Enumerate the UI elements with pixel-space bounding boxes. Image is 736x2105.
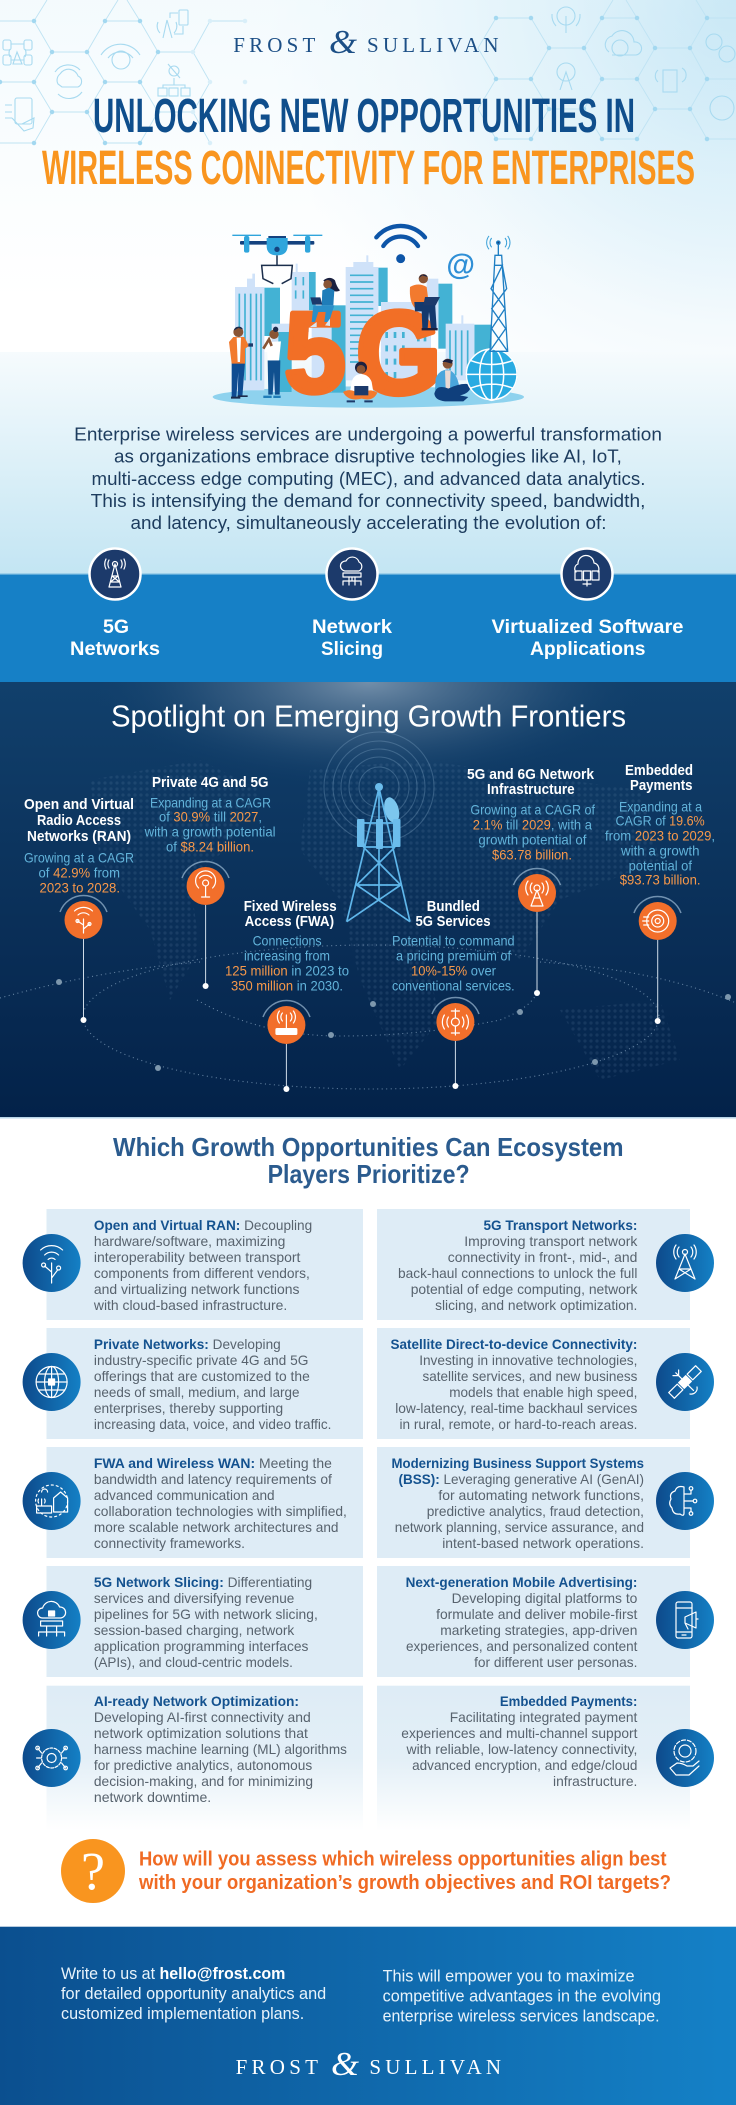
footer text: contact [61, 1965, 326, 2023]
panel: card AI-ready Network Optimization: AI-ready Network Optimization: [94, 1693, 299, 1709]
panel: card Satellite Direct-to-device: low-latency, real-time backhaul services [395, 1400, 637, 1416]
panel: card Satellite Direct-to-device: Investing in innovative technologies, [419, 1352, 637, 1368]
logo: footer Frost & Sullivan: & [331, 2046, 360, 2083]
panel: card Satellite Direct-to-device: in rural, remote, or hard-to-reach areas. [400, 1416, 637, 1432]
frontier: Open and Virtual RAN: Networks (RAN) [27, 828, 131, 845]
frontier: Bundled 5G Services: 10%-15% over [411, 962, 496, 978]
frontier: Embedded Payments: CAGR of 19.6% [616, 812, 705, 828]
frontier: 5G and 6G Network Infrastructure: $63.78 billion. [492, 846, 572, 862]
panel: card Satellite Direct-to-device: models that enable high speed, [449, 1384, 637, 1400]
frontier: Bundled 5G Services: conventional services. [392, 978, 515, 994]
panel: card Open and Virtual RAN: with cloud-based infrastructure. [93, 1297, 287, 1313]
panel: card Modernizing BSS: network planning, service assurance, and [395, 1519, 644, 1535]
frontier: 5G and 6G Network Infrastructure: 5G and 6G Network [467, 766, 595, 783]
panel: blue evolution band [0, 548, 736, 682]
frontier: Open and Virtual RAN: Open and Virtual [24, 796, 134, 813]
panel: card Embedded Payments: with reliable, low-latency connectivity, [406, 1741, 637, 1757]
panel: card Embedded Payments: Facilitating integrated payment [450, 1709, 637, 1725]
panel: card Private Networks: offerings that are customized to the [94, 1368, 310, 1384]
item: network slicing [312, 548, 392, 660]
item: network slicing: Network [312, 617, 392, 638]
icon: at sign: @ [446, 249, 475, 282]
frontier: Embedded Payments: Payments [630, 777, 692, 794]
panel: card FWA and Wireless WAN: collaboration technologies with simplified, [94, 1503, 347, 1519]
hexagon network pattern [0, 0, 736, 143]
intro paragraph: and latency, simultaneously accelerating the evolution of: [130, 512, 606, 533]
item: 5G networks [70, 548, 160, 660]
logo: footer Frost & Sullivan: FROST [236, 2055, 318, 2079]
panel: card 5G Network Slicing: (APIs), and cloud-centric models. [94, 1654, 293, 1670]
icon: wifi [376, 226, 425, 261]
frontier: Private 4G and 5G: of $8.24 billion. [166, 838, 254, 854]
frontier: Open and Virtual RAN: 2023 to 2028. [40, 880, 120, 896]
heading: Spotlight on Emerging Growth Frontiers [111, 699, 626, 734]
logo: footer Frost & Sullivan [236, 2046, 501, 2083]
frontier: Private 4G and 5G: Expanding at a CAGR [150, 794, 271, 810]
callout: question: with your organization’s growth objectives and ROI targets? [138, 1872, 671, 1894]
frontier: Private 4G and 5G: with a growth potential [144, 824, 276, 840]
frontier: Embedded Payments: Expanding at a [619, 798, 702, 814]
frontier: Embedded Payments: from 2023 to 2029, [605, 828, 715, 844]
item: virtualized software applications: Virtualized Software [492, 617, 684, 638]
panel: card 5G Transport Networks: connectivity in front-, mid-, and [448, 1249, 637, 1265]
logo: Frost & Sullivan [233, 24, 499, 61]
frontier: Embedded Payments [605, 762, 715, 1024]
panel: card FWA and Wireless WAN [23, 1447, 363, 1558]
footer text: contact: for detailed opportunity analytics and [61, 1985, 326, 2003]
header background [0, 0, 736, 574]
large 5G letters: 5 [284, 290, 346, 417]
frontier: Open and Virtual RAN: Radio Access [37, 812, 121, 829]
panel: card Next-generation Mobile Advertising [377, 1566, 714, 1677]
callout: question: How will you assess which wireless opportunities align best [139, 1849, 667, 1871]
footer text: empower: This will empower you to maximize [383, 1968, 635, 1986]
heading: which growth opportunities: Which Growth Opportunities Can Ecosystem [113, 1132, 624, 1162]
large 5G letters [284, 288, 441, 420]
panel: card 5G Transport Networks: 5G Transport Networks: [484, 1217, 637, 1233]
frontier: 5G and 6G Network Infrastructure: 2.1% till 2029, with a [473, 816, 592, 832]
panel: card 5G Transport Networks [377, 1209, 714, 1320]
footer text: empower: enterprise wireless services landscape. [383, 2008, 660, 2026]
frontier: 5G and 6G Network Infrastructure: growth potential of [478, 832, 587, 848]
frontier: Fixed Wireless Access: Fixed Wireless [244, 898, 337, 915]
panel: card 5G Transport Networks: back-haul connections to unlock the full [398, 1265, 637, 1281]
logo: Frost & Sullivan: SULLIVAN [367, 33, 498, 57]
panel: card Next-generation Mobile Advertising: Developing digital platforms to [452, 1590, 638, 1606]
frontier: Fixed Wireless Access: increasing from [244, 948, 330, 964]
logo: Frost & Sullivan: FROST [233, 33, 315, 57]
frontier: Fixed Wireless Access: Access (FWA) [245, 913, 334, 930]
panel: card AI-ready Network Optimization: decision-making, and for minimizing [94, 1773, 313, 1789]
frontier: Private 4G and 5G: of 30.9% till 2027, [159, 808, 262, 824]
item: virtualized software applications: Applications [530, 639, 646, 660]
frontier: Embedded Payments: potential of [629, 858, 692, 874]
frontier: Embedded Payments: Embedded [625, 762, 693, 779]
intro paragraph [74, 424, 662, 533]
frontier: Private 4G and 5G [144, 774, 276, 989]
panel: card Open and Virtual RAN: hardware/software, maximizing [94, 1233, 285, 1249]
panel: card FWA and Wireless WAN: more scalable network architectures and [94, 1519, 339, 1535]
footer text: empower [383, 1968, 661, 2026]
frontier: Fixed Wireless Access: 350 million in 2030. [231, 978, 343, 994]
frontier: Embedded Payments: $93.73 billion. [620, 872, 700, 888]
panel: card AI-ready Network Optimization: harness machine learning (ML) algorithms [94, 1741, 347, 1757]
people [229, 274, 472, 402]
heading: which growth opportunities [113, 1132, 624, 1189]
panel: card Modernizing BSS: (BSS): Leveraging generative AI (GenAI) [398, 1471, 644, 1487]
intro paragraph: as organizations embrace disruptive technologies like AI, IoT, [114, 446, 622, 467]
buildings [235, 255, 492, 393]
radio tower [487, 236, 510, 351]
panel: card AI-ready Network Optimization: Developing AI-first connectivity and [94, 1709, 311, 1725]
panel: card Embedded Payments: advanced encryption, and edge/cloud [412, 1757, 637, 1773]
frontier: 5G and 6G Network Infrastructure: Infrastructure [487, 781, 575, 798]
frontier: Bundled 5G Services: Potential to command [392, 932, 515, 948]
title [42, 90, 695, 195]
item: 5G networks: 5G [103, 617, 129, 638]
panel: card Embedded Payments [377, 1686, 714, 1831]
panel: card Private Networks: increasing data, voice, and video traffic. [94, 1416, 331, 1432]
frontier: 5G and 6G Network Infrastructure: Growing at a CAGR of [470, 802, 595, 818]
frontier: Private 4G and 5G: Private 4G and 5G [152, 774, 268, 791]
frontier: Open and Virtual RAN: Growing at a CAGR [24, 850, 134, 866]
heading: which growth opportunities: Players Prioritize? [268, 1159, 470, 1189]
panel: card Private Networks: enterprises, thereby supporting [94, 1400, 283, 1416]
drone [232, 235, 322, 284]
panel: card Private Networks: industry-specific private 4G and 5G [94, 1352, 308, 1368]
logo: footer Frost & Sullivan: SULLIVAN [369, 2055, 501, 2079]
panel: card Open and Virtual RAN: and virtualizing network functions [94, 1281, 300, 1297]
panel: card Private Networks [23, 1328, 363, 1439]
callout: question: ? [81, 1841, 105, 1901]
panel: card Embedded Payments: Embedded Payments: [500, 1693, 637, 1709]
panel: card Modernizing BSS [377, 1447, 714, 1558]
orbit dotted rings [0, 945, 736, 1089]
frontier: Fixed Wireless Access [225, 898, 349, 1092]
item: network slicing: Slicing [321, 639, 383, 660]
frontier: Open and Virtual RAN: of 42.9% from [38, 864, 120, 880]
panel: card Next-generation Mobile Advertising: for different user personas. [474, 1654, 637, 1670]
item: 5G networks: Networks [70, 639, 160, 660]
panel: card Open and Virtual RAN: interoperability between transport [94, 1249, 301, 1265]
intro paragraph: Enterprise wireless services are undergoing a powerful transformation [74, 424, 662, 445]
panel: card Satellite Direct-to-device: Satellite Direct-to-device Connectivity: [390, 1336, 637, 1352]
intro paragraph: This is intensifying the demand for connectivity speed, bandwidth, [91, 490, 645, 511]
panel: card Modernizing BSS: intent-based network operations. [442, 1535, 644, 1551]
panel: card 5G Network Slicing: services and diversifying revenue [94, 1590, 294, 1606]
panel: card Open and Virtual RAN: Open and Virtual RAN: Decoupling [94, 1217, 312, 1233]
frontier: Bundled 5G Services: Bundled [427, 898, 480, 915]
logo: Frost & Sullivan: & [329, 24, 358, 61]
frontier: Bundled 5G Services [392, 898, 515, 1089]
panel: card 5G Transport Networks: slicing, and network optimization. [435, 1297, 637, 1313]
panel: card Modernizing BSS: for automating network functions, [438, 1487, 644, 1503]
panel: card AI-ready Network Optimization: for predictive analytics, autonomous [94, 1757, 312, 1773]
callout: question [61, 1839, 671, 1903]
panel: card AI-ready Network Optimization: network optimization solutions that [94, 1725, 308, 1741]
panel: card Embedded Payments: infrastructure. [553, 1773, 637, 1789]
panel: card 5G Transport Networks: potential of edge computing, network [411, 1281, 638, 1297]
panel: card Next-generation Mobile Advertising: Next-generation Mobile Advertising: [406, 1574, 637, 1590]
illustration: 5G city [213, 226, 524, 420]
panel: card Private Networks: Private Networks: Developing [94, 1336, 281, 1352]
frontier: 5G and 6G Network Infrastructure [467, 766, 595, 996]
panel: card Private Networks: needs of small, medium, and large [94, 1384, 300, 1400]
panel: footer [0, 1927, 736, 2105]
panel: card Satellite Direct-to-device: satellite services, and new business [422, 1368, 637, 1384]
globe [466, 348, 518, 400]
frontier: Bundled 5G Services: a pricing premium of [396, 948, 511, 964]
panel: card Open and Virtual RAN: components from different vendors, [94, 1265, 310, 1281]
panel: card FWA and Wireless WAN: bandwidth and latency requirements of [94, 1471, 332, 1487]
panel: card Open and Virtual RAN [23, 1209, 363, 1320]
footer text: contact: customized implementation plans. [61, 2005, 304, 2023]
panel: card 5G Transport Networks: Improving transport network [464, 1233, 638, 1249]
panel: card Next-generation Mobile Advertising: experiences, and personalized content [406, 1638, 638, 1654]
panel: card AI-ready Network Optimization: network downtime. [94, 1789, 211, 1805]
panel: card FWA and Wireless WAN: connectivity frameworks. [94, 1535, 245, 1551]
frontier: Bundled 5G Services: 5G Services [416, 913, 490, 930]
panel: card FWA and Wireless WAN: FWA and Wireless WAN: Meeting the [94, 1455, 332, 1471]
frontier: Open and Virtual RAN [24, 796, 134, 1023]
panel: card Satellite Direct-to-device [377, 1328, 714, 1439]
panel: card 5G Network Slicing: 5G Network Slicing: Differentiating [94, 1574, 312, 1590]
footer text: contact: Write to us at hello@frost.com [61, 1965, 285, 1983]
footer text: empower: competitive advantages in the evolving [383, 1988, 661, 2006]
panel: card 5G Network Slicing: session-based charging, network [94, 1622, 295, 1638]
orbit nodes [56, 979, 731, 1071]
frontier: Fixed Wireless Access: 125 million in 2023 to [225, 962, 349, 978]
intro paragraph: multi-access edge computing (MEC), and advanced data analytics. [92, 468, 645, 489]
panel: card Modernizing BSS: predictive analytics, fraud detection, [427, 1503, 644, 1519]
item: virtualized software applications [492, 548, 684, 660]
frontier: Embedded Payments: with a growth [620, 842, 700, 858]
panel: card Next-generation Mobile Advertising: marketing strategies, app-driven [440, 1622, 637, 1638]
panel: card 5G Network Slicing: application programming interfaces [94, 1638, 308, 1654]
panel: card Embedded Payments: experiences and multi-channel support [401, 1725, 637, 1741]
panel: card AI-ready Network Optimization [23, 1686, 363, 1831]
panel: card 5G Network Slicing: pipelines for 5G with network slicing, [94, 1606, 318, 1622]
cell tower [324, 732, 434, 922]
frontier: Fixed Wireless Access: Connections [253, 932, 322, 948]
panel: card Modernizing BSS: Modernizing Business Support Systems [392, 1455, 644, 1471]
panel: card Next-generation Mobile Advertising: formulate and deliver mobile-first [436, 1606, 637, 1622]
large 5G letters: G [356, 288, 441, 420]
panel: spotlight dark section [0, 682, 736, 1118]
panel: card 5G Network Slicing [23, 1566, 363, 1677]
panel: card FWA and Wireless WAN: advanced communication and [94, 1487, 275, 1503]
dotted world map [90, 760, 680, 1080]
